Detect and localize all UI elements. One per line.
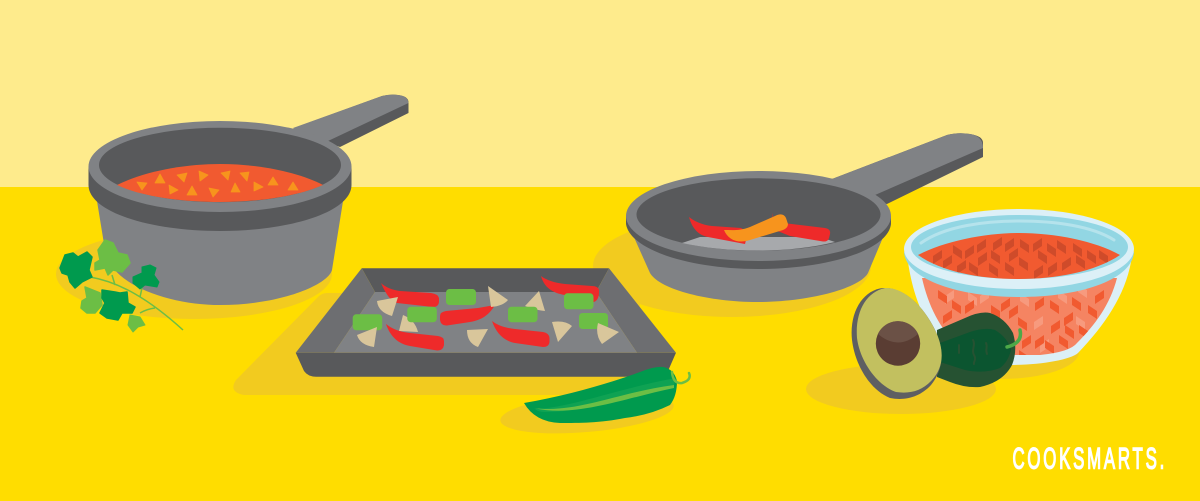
poblano inner (940, 329, 1011, 372)
saucepan interior (99, 128, 341, 202)
tray right wall (596, 268, 676, 353)
jalapeno stem (672, 372, 690, 383)
saucepan handle (293, 95, 408, 141)
cilantro leaf: dark lower (100, 290, 135, 320)
shadow: frying pan (593, 215, 871, 317)
chip behind pepper (525, 291, 545, 311)
red peppers (381, 276, 599, 351)
jalapeno highlight band (535, 378, 676, 412)
cilantro leaf: dark upper (60, 252, 92, 288)
frying pan rim (626, 171, 891, 261)
background wall (0, 0, 1200, 187)
roasting tray (296, 268, 676, 377)
jalapeno pepper (524, 367, 690, 423)
tray left wall (296, 268, 375, 353)
shadow: pot (56, 229, 332, 319)
chip near center (399, 315, 418, 332)
red pepper left (689, 217, 748, 244)
frying pan handle (832, 133, 983, 195)
salsa surface pattern (933, 237, 1108, 279)
salsa pattern (938, 290, 1104, 361)
red pepper right (772, 213, 830, 242)
shadow: jalapeno (499, 386, 675, 440)
bowl highlight (921, 221, 1114, 243)
jalapeno stripe (534, 385, 674, 411)
cilantro leaf: dark small (133, 265, 159, 289)
cilantro sprig (60, 240, 183, 332)
logo: Cook Smarts: COOKSMARTS. (1012, 443, 1167, 476)
orange pepper (724, 214, 788, 242)
salsa in bowl body (922, 278, 1117, 355)
green pepper pieces (353, 289, 608, 330)
bowl rim band (904, 252, 1134, 297)
frying pan (626, 133, 983, 302)
saucepan body (96, 195, 344, 305)
glass bowl (904, 209, 1134, 365)
salsa pattern faint (945, 284, 1087, 353)
tray front wall (296, 353, 676, 377)
poblano stem (1007, 330, 1020, 347)
frying pan rim band (626, 216, 891, 269)
poblano pepper (937, 313, 1020, 387)
bowl rim (904, 209, 1134, 289)
frying pan body (633, 235, 884, 302)
avocado pit highlight (878, 321, 918, 342)
poblano ridges (959, 340, 987, 364)
salsa surface (918, 233, 1120, 279)
shadow: bowl (921, 325, 1079, 379)
shadow: tray (233, 293, 640, 395)
cilantro leaf: light upper (95, 240, 130, 275)
tray floor (334, 292, 637, 353)
cilantro leaf: light small (128, 315, 145, 332)
avocado half (852, 288, 942, 399)
avocado pit (876, 321, 920, 366)
avocado flesh (857, 288, 942, 393)
tomato sauce (117, 164, 323, 202)
saucepan rim band (88, 166, 352, 231)
sauce chips (137, 171, 298, 197)
pan floor (682, 237, 835, 250)
frying pan interior (636, 178, 880, 251)
saucepan rim (88, 121, 352, 212)
shadow: avocado (806, 364, 996, 414)
cilantro leaf: light lower (81, 287, 102, 313)
bowl interior (911, 215, 1128, 279)
saucepan (88, 95, 408, 305)
onion chips (357, 286, 619, 347)
